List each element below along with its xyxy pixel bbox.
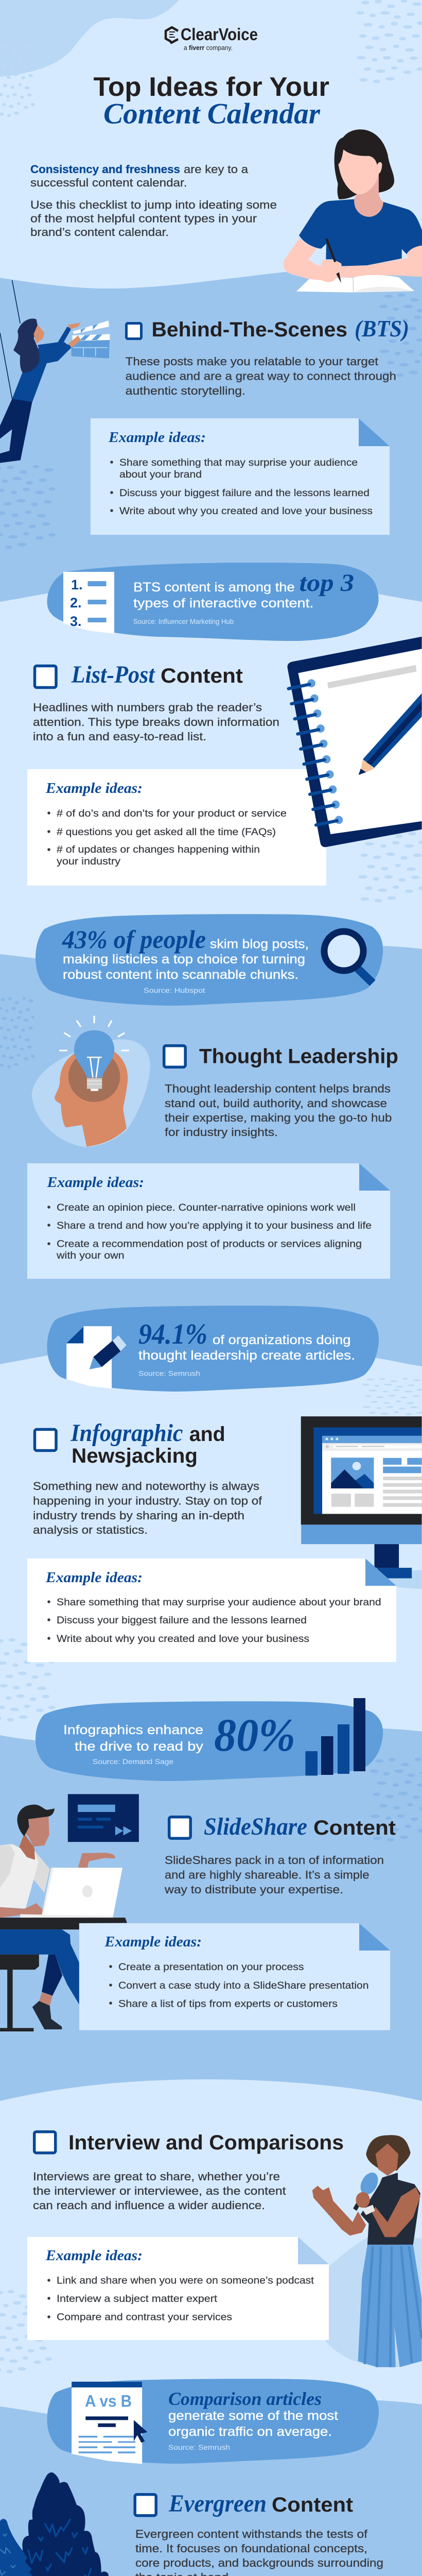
intro text: Use this checklist to jump into ideating some: [30, 198, 277, 211]
example card: Interview a subject matter expert: [57, 2293, 218, 2304]
example card: Example ideas:: [46, 1174, 144, 1191]
description: stand out, build authority, and showcase: [165, 1097, 387, 1110]
heading: and: [189, 1423, 225, 1446]
description: [33, 1480, 262, 1536]
illustration: trees: [0, 2472, 134, 2576]
example card: Write about why you created and love your business: [57, 1633, 309, 1645]
example card: Example ideas:: [108, 429, 206, 446]
intro text: successful content calendar.: [30, 176, 187, 189]
stat text: Source: Semrush: [168, 2444, 230, 2451]
description: Something new and noteworthy is always: [33, 1480, 259, 1493]
description: [33, 701, 279, 743]
description: the interviewer or interviewee, as the content: [33, 2184, 286, 2197]
illustration: woman with clapperboard: [0, 280, 110, 463]
heading: [204, 1813, 396, 1840]
heading: Interview and Comparisons: [68, 2131, 344, 2154]
icon: ClearVoice mark: [166, 27, 178, 43]
checkbox: [35, 666, 56, 687]
description: SlideShares pack in a ton of information: [165, 1854, 384, 1867]
example card: Link and share when you were on someone’s podcast: [57, 2275, 314, 2286]
description: attention. This type breaks down information: [33, 716, 279, 728]
intro text: Consistency and freshness: [30, 163, 180, 176]
stat text: 94.1%: [138, 1318, 207, 1350]
description: [126, 355, 396, 397]
icon: paper and pencil: [66, 1326, 127, 1388]
illustration: man at laptop: [0, 1794, 139, 2031]
title: Content Calendar: [103, 98, 321, 130]
header logo: [166, 25, 258, 52]
heading: (BTS): [355, 316, 409, 342]
stat text: [62, 925, 309, 994]
stat text: of organizations doing: [213, 1333, 351, 1347]
example card: # of updates or changes happening within: [57, 844, 260, 855]
example card: [79, 1923, 390, 2030]
description: authentic storytelling.: [126, 384, 245, 397]
heading: SlideShare: [204, 1813, 307, 1840]
example card: with your own: [56, 1250, 125, 1261]
stat text: BTS content is among the: [133, 580, 295, 595]
example card: Convert a case study into a SlideShare presentation: [118, 1980, 368, 1991]
description: Interviews are great to share, whether you’re: [33, 2170, 280, 2183]
heading: [151, 316, 409, 342]
icon label: A vs B: A vs B: [85, 2392, 132, 2410]
section: SlideShare Content: [0, 1794, 396, 2031]
checkbox: [169, 1817, 190, 1838]
description: Evergreen content withstands the tests of: [135, 2528, 368, 2540]
stat text: [133, 569, 354, 625]
heading: Content: [161, 665, 243, 687]
illustration: woman with microphone: [312, 2135, 422, 2367]
checkbox: [135, 2495, 156, 2516]
background wave band 2: [0, 946, 422, 1366]
description: happening in your industry. Stay on top of: [33, 1495, 262, 1507]
stat text: organic traffic on average.: [168, 2425, 332, 2439]
description: for industry insights.: [165, 1126, 278, 1139]
example card: about your brand: [119, 469, 202, 480]
example card: Discuss your biggest failure and the lessons learned: [119, 487, 370, 499]
description: core products, and backgrounds surrounding: [135, 2556, 383, 2569]
description: Headlines with numbers grab the reader’s: [33, 701, 262, 714]
description: their expertise, making you the go-to hub: [165, 1111, 392, 1124]
description: way to distribute your expertise.: [164, 1883, 343, 1896]
background wave band 1: [0, 272, 422, 602]
example card: Create an opinion piece. Counter-narrative opinions work well: [57, 1202, 356, 1213]
top left blob: [0, 0, 179, 77]
intro text: of the most helpful content types in your: [30, 212, 257, 225]
stat text: skim blog posts,: [210, 937, 309, 951]
example card: Example ideas:: [45, 1569, 143, 1586]
description: [164, 1854, 384, 1896]
description: audience and are a great way to connect through: [126, 370, 396, 382]
example card: [91, 418, 390, 535]
description: Thought leadership content helps brands: [165, 1082, 391, 1095]
stat: top 3 interactive: [47, 563, 379, 641]
description: [165, 1082, 392, 1139]
stat text: robust content into scannable chunks.: [63, 968, 298, 982]
logo tagline: a fiverr company.: [184, 44, 233, 52]
section: List-Post Content: [27, 637, 422, 886]
stat text: types of interactive content.: [133, 596, 314, 611]
heading: [71, 661, 243, 688]
example card: [27, 2237, 329, 2340]
illustration: computer monitor: [301, 1416, 422, 1589]
example card: Create a recommendation post of products or services aligning: [57, 1239, 362, 1250]
heading: Infographic: [71, 1419, 183, 1447]
description: analysis or statistics.: [33, 1523, 148, 1536]
example card: Share something that may surprise your audience: [119, 457, 358, 468]
chart: rising bars: [306, 1698, 365, 1775]
example card: [27, 1163, 390, 1279]
section: Evergreen Content: [0, 2472, 387, 2576]
icon: magnifying glass: [324, 931, 373, 983]
stat text: making listicles a top choice for turning: [63, 952, 305, 967]
stat text: 43% of people: [62, 925, 206, 954]
stat: 94.1%: [47, 1306, 379, 1392]
description: can reach and influence a wider audience.: [33, 2199, 265, 2212]
example card: Write about why you created and love your business: [119, 505, 373, 517]
checkbox: [127, 324, 141, 339]
heading: Evergreen: [168, 2490, 267, 2517]
example card: Example ideas:: [45, 2247, 143, 2264]
stat text: Source: Hubspot: [144, 987, 205, 994]
example card: Example ideas:: [45, 780, 143, 796]
heading: [71, 1419, 225, 1467]
example card: Compare and contrast your services: [57, 2312, 232, 2323]
checkbox: [164, 1046, 185, 1067]
example card: Discuss your biggest failure and the lessons learned: [57, 1615, 307, 1626]
title: Top Ideas for Your: [94, 72, 329, 102]
description: [135, 2528, 383, 2576]
stat text: generate some of the most: [168, 2409, 338, 2423]
example card: Share something that may surprise your audience about your brand: [57, 1597, 381, 1608]
icon: A vs B document: [72, 2382, 148, 2464]
description: time. It focuses on foundational concepts,: [135, 2542, 367, 2555]
example card: # questions you get asked all the time (FAQs): [57, 826, 276, 838]
stat text: [138, 1318, 355, 1378]
stat text: Infographics enhance: [63, 1723, 203, 1737]
stat text: [168, 2388, 338, 2451]
stat text: Source: Influencer Marketing Hub: [133, 618, 234, 625]
stat text: Comparison articles: [168, 2388, 322, 2409]
section: Infographic and Newsjacking: [27, 1416, 422, 1662]
logo wordmark: ClearVoice: [181, 25, 258, 44]
stat text: top 3: [300, 569, 354, 597]
stat text: the drive to read by: [75, 1739, 204, 1754]
example card: Create a presentation on your process: [118, 1961, 304, 1973]
icon: numbered list: 2.: [70, 595, 82, 611]
title: [94, 72, 329, 130]
example card: [27, 769, 326, 886]
description: These posts make you relatable to your target: [126, 355, 378, 368]
checkbox: [34, 2132, 56, 2153]
stat: comparison articles: [47, 2379, 379, 2464]
icon: numbered list: 3.: [70, 614, 82, 629]
stat text: [63, 1710, 295, 1766]
illustration: woman writing: [284, 129, 422, 293]
heading: [168, 2490, 353, 2517]
stat text: thought leadership create articles.: [138, 1348, 355, 1363]
intro text: are key to a: [184, 163, 249, 176]
heading: Behind-The-Scenes: [151, 318, 347, 341]
section: Interview and Comparisons: [27, 2131, 422, 2367]
background wave band 3: [0, 1728, 422, 2101]
icon: numbered list: [63, 572, 114, 634]
heading: Newsjacking: [72, 1445, 198, 1467]
heading: Content: [313, 1817, 396, 1839]
checkbox: [35, 1429, 56, 1451]
stat text: 80%: [214, 1710, 295, 1761]
icon: numbered list: 1.: [71, 577, 83, 592]
intro text: [30, 163, 277, 239]
heading: Content: [272, 2494, 353, 2516]
example card: Share a list of tips from experts or customers: [118, 1998, 338, 2010]
heading: Thought Leadership: [199, 1045, 398, 1067]
intro text: brand’s content calendar.: [30, 226, 169, 239]
description: industry trends by sharing an in-depth: [33, 1509, 244, 1522]
example card: # of do’s and don’ts for your product or service: [57, 808, 287, 819]
stat text: Source: Demand Sage: [93, 1758, 173, 1766]
example card: your industry: [57, 856, 120, 867]
stat: 43% of people: [36, 914, 383, 1006]
example card: [27, 1558, 396, 1662]
description: into a fun and easy-to-read list.: [33, 730, 206, 743]
stat text: Source: Semrush: [138, 1370, 200, 1378]
illustration: head with light bulb: [32, 1016, 150, 1147]
example card: Example ideas:: [104, 1934, 202, 1950]
heading: List-Post: [71, 661, 155, 688]
description: [33, 2170, 286, 2212]
illustration: notebook and pencil: [287, 637, 422, 847]
stat: 80%: [36, 1698, 383, 1781]
section: Behind-The-Scenes: [0, 280, 409, 535]
example card: Share a trend and how you’re applying it to your business and life: [57, 1220, 372, 1231]
description: and are highly shareable. It’s a simple: [165, 1869, 370, 1882]
background wave band 4: [0, 2400, 422, 2576]
section: Thought Leadership: [27, 1016, 398, 1279]
